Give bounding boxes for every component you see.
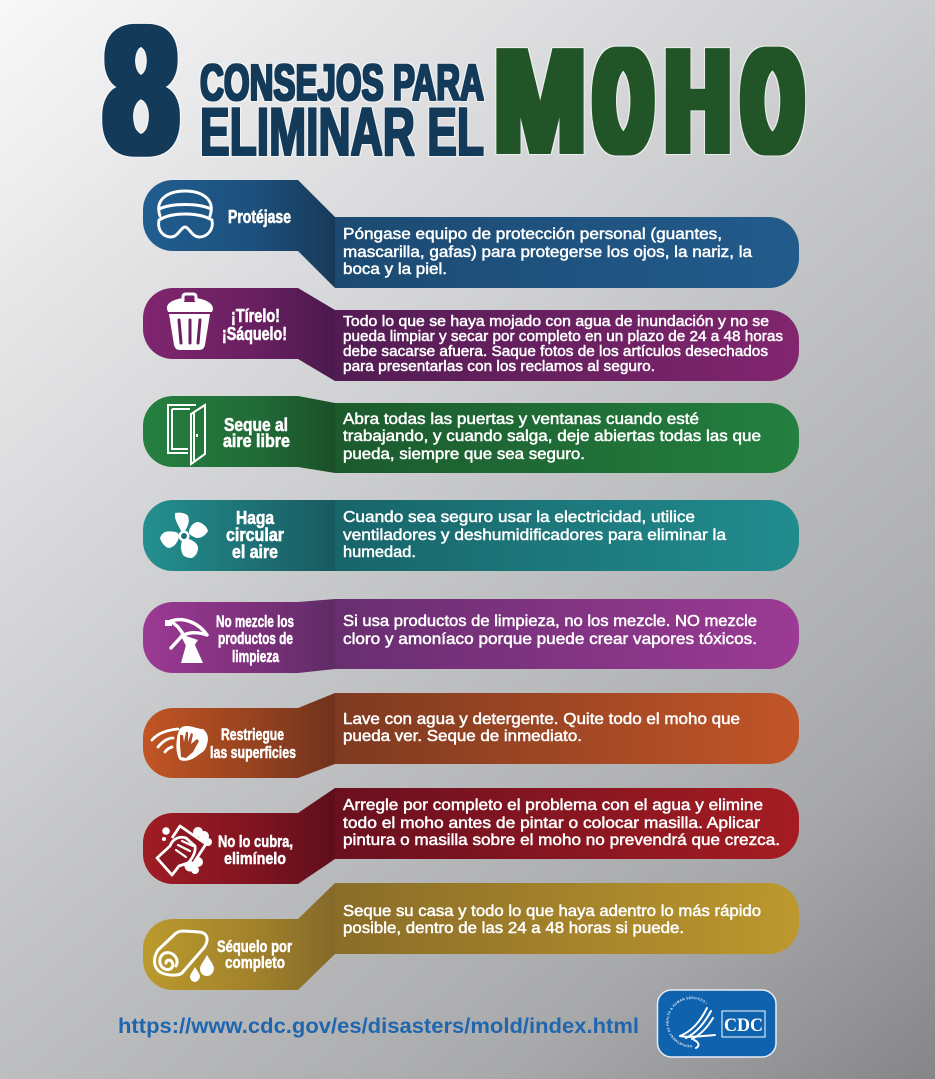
icon: towel and drops	[154, 931, 214, 982]
title line: eliminar el: ELIMINAR EL	[200, 94, 484, 170]
label: Haga	[236, 508, 275, 528]
icon: spray bottle	[165, 620, 207, 663]
title word: moho: M	[494, 19, 586, 184]
label: Séquelo por	[217, 938, 292, 956]
icon: open door	[168, 405, 205, 464]
panel: séquelo por completo	[143, 883, 799, 990]
left tab	[143, 396, 335, 473]
label: completo	[225, 954, 285, 972]
icon: hand scrubbing	[152, 726, 208, 761]
label: No mezcle los	[216, 613, 294, 631]
label: productos de	[218, 630, 293, 648]
icon: goggles	[159, 191, 212, 237]
description: debe sacarse afuera. Saque fotos de los artículos desechados	[343, 344, 768, 360]
description: pintura o masilla sobre el moho no prevendrá que crezca.	[343, 832, 780, 849]
label: No lo cubra,	[218, 833, 293, 851]
title word: moho: O	[596, 19, 651, 184]
label	[223, 415, 290, 451]
title word: moho: O	[744, 19, 801, 184]
description: pueda ver. Seque de inmediato.	[343, 728, 582, 745]
panel: tírelo	[143, 288, 799, 381]
left tab	[143, 693, 335, 778]
seal text: DEPARTMENT OF HEALTH & HUMAN SERVICES • USA	[666, 996, 707, 1048]
label: circular	[226, 525, 284, 545]
description: ventiladores y deshumidificadores para eliminar la	[343, 527, 726, 544]
label: las superficies	[210, 744, 296, 762]
panel: haga circular el aire	[143, 500, 799, 571]
icon: fan	[160, 513, 208, 558]
title word: moho	[494, 19, 801, 184]
left tab	[143, 500, 335, 571]
label	[216, 613, 294, 666]
description: cloro y amoníaco porque puede crear vapores tóxicos.	[343, 631, 757, 648]
panel: restriegue las superficies	[143, 693, 799, 778]
right bar	[335, 883, 799, 954]
description: pueda limpiar y secar por completo en un plazo de 24 a 48 horas	[343, 329, 783, 345]
description: Arregle por completo el problema con el agua y elimine	[343, 797, 763, 814]
title	[104, 0, 801, 192]
panel: no lo cubra	[143, 788, 799, 884]
label	[217, 938, 292, 972]
left tab	[143, 599, 335, 673]
label: ¡Sáquelo!	[222, 324, 287, 344]
right bar	[335, 403, 799, 473]
description	[343, 711, 740, 745]
url: https://www.cdc.gov/es/disasters/mold/index.html	[118, 1015, 639, 1038]
description: todo el moho antes de pintar o colocar masilla. Aplicar	[343, 815, 761, 832]
description: Abra todas las puertas y ventanas cuando esté	[343, 411, 699, 428]
CDC mark	[722, 1011, 765, 1037]
description: mascarilla, gafas) para protegerse los ojos, la nariz, la	[343, 244, 752, 261]
label: Protéjase	[228, 207, 291, 227]
panel: seque al aire libre	[143, 396, 799, 473]
description: Si usa productos de limpieza, no los mezcle. NO mezcle	[343, 613, 757, 630]
left tab	[143, 288, 335, 381]
right bar	[335, 599, 799, 669]
description: Todo lo que se haya mojado con agua de inundación y no se	[343, 314, 769, 330]
label	[218, 833, 293, 868]
label	[226, 508, 284, 562]
description: para presentarlas con los reclamos al seguro.	[343, 359, 655, 375]
left tab	[143, 788, 335, 884]
right bar	[335, 788, 799, 859]
description	[343, 411, 761, 463]
label: aire libre	[223, 431, 290, 451]
description	[343, 314, 783, 375]
panel: protéjase	[143, 180, 799, 288]
description: trabajando, y cuando salga, deje abiertas todas las que	[343, 428, 761, 445]
description: Seque su casa y todo lo que haya adentro lo más rápido	[343, 903, 761, 920]
label: elimínelo	[224, 850, 286, 868]
description: posible, dentro de las 24 a 48 horas si puede.	[343, 920, 684, 937]
description: Póngase equipo de protección personal (guantes,	[343, 226, 722, 243]
description	[343, 226, 752, 278]
description	[343, 613, 757, 648]
logo background	[658, 990, 776, 1057]
CDC letters: CDC	[724, 1015, 763, 1036]
right bar	[335, 217, 799, 288]
description	[343, 509, 726, 561]
label: limpieza	[232, 648, 280, 666]
label: el aire	[232, 542, 278, 562]
right bar	[335, 693, 799, 764]
title word: moho: H	[666, 19, 730, 184]
description: boca y la piel.	[343, 261, 447, 278]
right bar	[335, 500, 799, 571]
description: humedad.	[343, 544, 416, 561]
label: ¡Tírelo!	[231, 306, 280, 326]
description: Lave con agua y detergente. Quite todo el moho que	[343, 711, 740, 728]
label	[222, 306, 287, 344]
eagle symbol	[680, 1008, 715, 1048]
description	[343, 797, 780, 849]
description	[343, 903, 761, 937]
left tab	[143, 883, 335, 990]
label: Restriegue	[221, 726, 284, 744]
left tab	[143, 180, 335, 288]
icon: trash can	[167, 294, 213, 350]
label: Seque al	[224, 415, 288, 435]
description: pueda, siempre que sea seguro.	[343, 446, 585, 463]
panel: no mezcle los productos	[143, 599, 799, 673]
icon: hand with sponge	[157, 826, 212, 875]
description: Cuando sea seguro usar la electricidad, utilice	[343, 509, 695, 526]
right bar	[335, 310, 799, 381]
label	[210, 726, 296, 762]
title line: consejos para: CONSEJOS PARA	[200, 54, 484, 111]
